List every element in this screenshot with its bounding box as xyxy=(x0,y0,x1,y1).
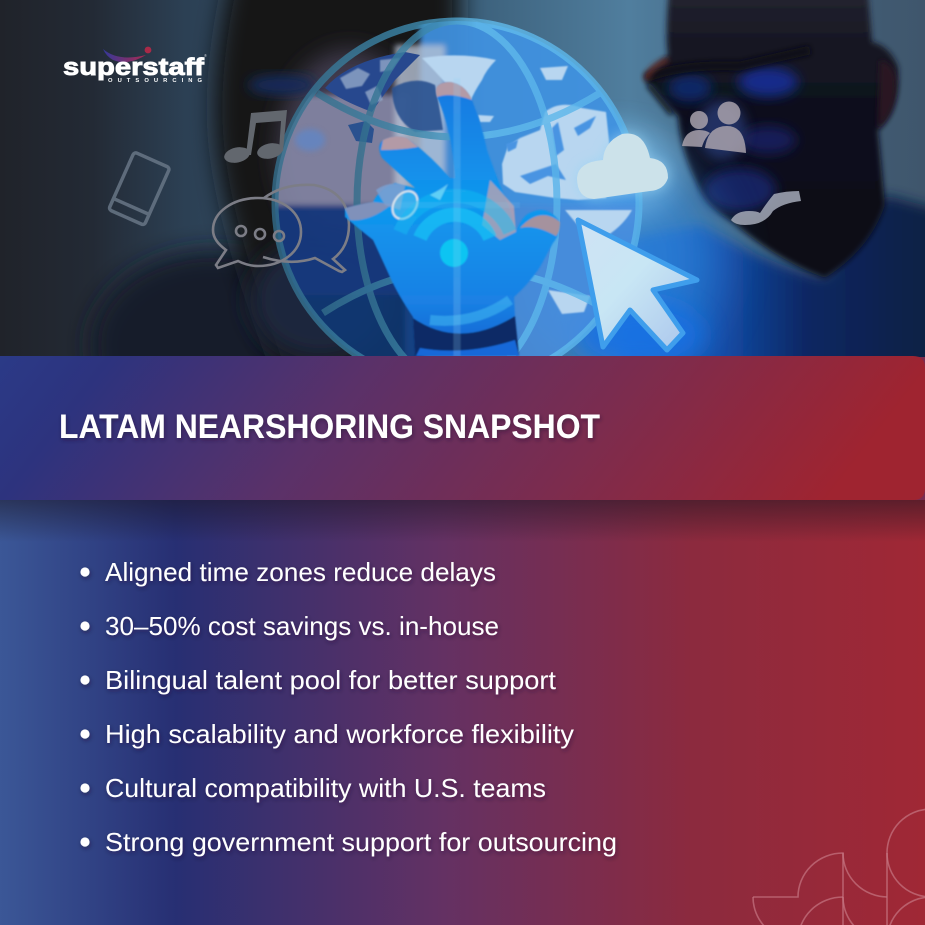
icon: cloud xyxy=(577,134,668,199)
item: time zones: Aligned time zones reduce delays xyxy=(105,557,496,587)
item: government: Strong government support for outsourcing xyxy=(105,827,617,857)
decorative corner lines xyxy=(753,809,925,925)
continents xyxy=(340,58,400,105)
item: cost savings: 30–50% cost savings vs. in-house xyxy=(105,611,499,641)
globe grid lines xyxy=(275,21,640,385)
banner panel xyxy=(0,356,925,500)
logo: superstaff xyxy=(63,54,205,81)
icon: people xyxy=(682,102,746,153)
blurred man xyxy=(637,0,925,357)
icon: phone xyxy=(109,152,170,225)
icon: chat bubbles xyxy=(213,185,349,272)
icon: cursor arrow xyxy=(578,220,697,350)
icon: music note xyxy=(223,110,287,165)
blue glow xyxy=(500,120,720,370)
logo xyxy=(63,47,207,84)
globe xyxy=(260,0,660,405)
blurred woman xyxy=(88,0,477,356)
hero photo xyxy=(0,0,925,440)
bullet list xyxy=(80,557,617,857)
heading: LATAM NEARSHORING SNAPSHOT xyxy=(59,408,600,446)
lower background xyxy=(0,500,925,925)
icon: music note right xyxy=(731,191,801,225)
logo: OUTSOURCING xyxy=(108,78,202,84)
item: scalability: High scalability and workforce flexibility xyxy=(105,719,574,749)
item: cultural: Cultural compatibility with U.S. teams xyxy=(105,773,546,803)
item: bilingual: Bilingual talent pool for better support xyxy=(105,665,557,695)
logo: ® xyxy=(204,53,207,58)
hand xyxy=(345,78,560,356)
